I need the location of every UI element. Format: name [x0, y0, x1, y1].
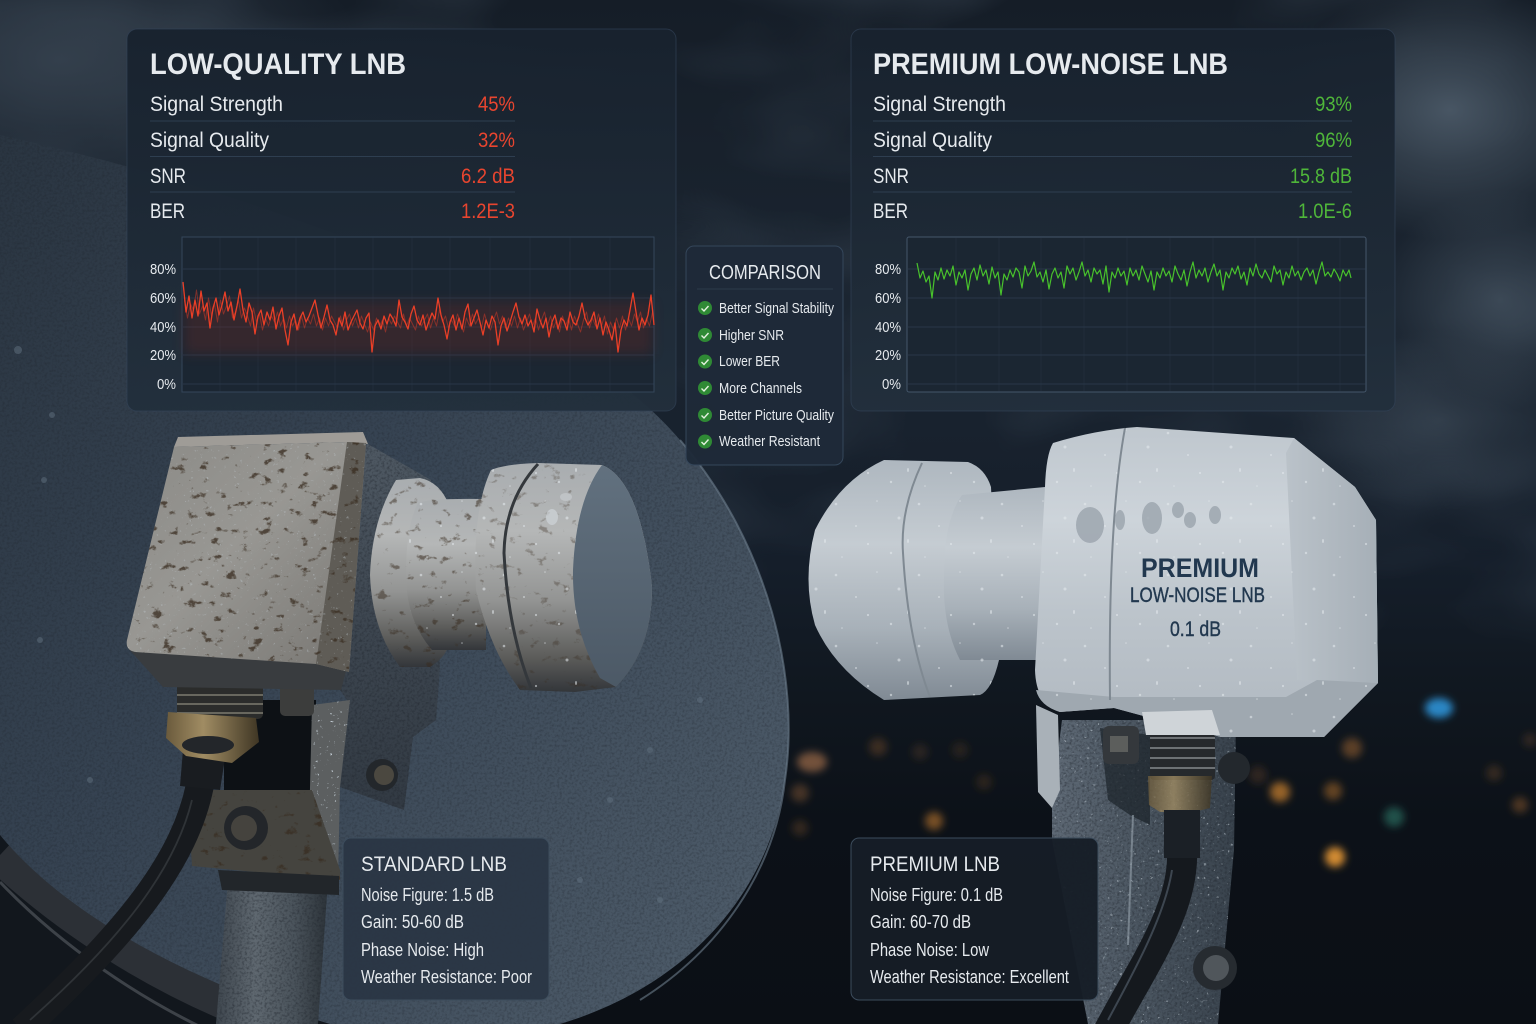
metrics table: Signal Strength — [150, 93, 283, 116]
spec list: Noise Figure: 0.1 dB — [870, 885, 1003, 905]
chart: red unstable signal — [150, 237, 654, 393]
chart: red unstable signal: 80% — [150, 262, 176, 278]
printed device label: LOW-NOISE LNB — [1130, 584, 1265, 607]
checklist items: More Channels — [719, 380, 802, 397]
bolt — [366, 759, 398, 791]
feed cap — [808, 460, 999, 700]
checklist items: Lower BER — [719, 353, 780, 370]
metrics table: 96% — [1315, 129, 1352, 152]
threaded connector — [166, 677, 263, 763]
spec list: Weather Resistance: Poor — [361, 967, 532, 987]
heading: PREMIUM LNB — [870, 853, 1000, 876]
support pipe — [216, 880, 328, 1024]
neck ring — [370, 478, 449, 667]
chart: green stable signal: 80% — [875, 262, 901, 278]
bolt — [280, 684, 314, 716]
chart: red unstable signal: 60% — [150, 291, 176, 307]
bright bar — [308, 700, 350, 880]
bolt — [1193, 946, 1237, 990]
checklist items — [719, 300, 834, 450]
metrics table: SNR — [873, 165, 909, 188]
panel: low-quality LNB — [127, 29, 676, 411]
heading: PREMIUM LOW-NOISE LNB — [873, 48, 1228, 81]
feed cap — [475, 463, 652, 692]
clamp — [190, 790, 340, 895]
chart: red unstable signal: 0% — [157, 377, 176, 393]
metrics table — [873, 93, 1352, 223]
threaded connector — [1148, 725, 1215, 812]
chart: green stable signal: 0% — [882, 377, 901, 393]
spec list — [361, 885, 532, 987]
bolt — [1218, 752, 1250, 784]
chart: green stable signal: 20% — [875, 348, 901, 364]
chart: green stable signal — [875, 237, 1366, 393]
premium LNB device — [808, 427, 1378, 1024]
collar — [1142, 710, 1220, 735]
heading: LOW-QUALITY LNB — [150, 48, 406, 81]
metrics table: 15.8 dB — [1290, 165, 1352, 188]
neck cylinder — [944, 487, 1045, 660]
check icons — [698, 301, 712, 448]
spec list: Gain: 60-70 dB — [870, 912, 971, 932]
bolt — [224, 806, 268, 850]
chart: green stable signal: 40% — [875, 320, 901, 336]
metrics table: SNR — [150, 165, 186, 188]
checklist items: Better Signal Stability — [719, 300, 834, 317]
metrics table: 1.2E-3 — [461, 200, 515, 223]
metrics table: 32% — [478, 129, 515, 152]
mounting bracket — [1036, 705, 1250, 1024]
metrics table: BER — [873, 200, 908, 223]
metrics table — [150, 93, 515, 223]
metrics table: Signal Quality — [873, 129, 992, 152]
spec list: Phase Noise: Low — [870, 940, 990, 960]
spec list: Weather Resistance: Excellent — [870, 967, 1069, 987]
metrics table: 6.2 dB — [461, 165, 515, 188]
printed device label — [1130, 553, 1265, 641]
dark cavity — [224, 700, 316, 795]
city bokeh lights — [791, 698, 1536, 867]
satellite dish — [0, 155, 790, 1024]
panel: premium low-noise LNB — [851, 29, 1395, 411]
checklist items: Better Picture Quality — [719, 407, 834, 424]
spec list: Phase Noise: High — [361, 940, 484, 960]
cable — [22, 750, 226, 1024]
box front — [127, 442, 366, 672]
neck cylinder — [406, 499, 486, 650]
low-quality LNB device — [22, 432, 652, 1024]
bolt — [1103, 726, 1139, 764]
housing body — [1035, 427, 1378, 737]
box top — [174, 432, 368, 447]
L bracket — [190, 443, 440, 895]
chart: green stable signal: 60% — [875, 291, 901, 307]
spec list: Noise Figure: 1.5 dB — [361, 885, 494, 905]
spec list — [870, 885, 1069, 987]
metrics table: BER — [150, 200, 185, 223]
panel: premium LNB specs — [851, 838, 1098, 1000]
metrics table: 1.0E-6 — [1298, 200, 1352, 223]
cable — [1108, 810, 1200, 1024]
spec list: Gain: 50-60 dB — [361, 912, 464, 932]
chart: red unstable signal: 20% — [150, 348, 176, 364]
chart: red unstable signal: 40% — [150, 320, 176, 336]
printed device label: PREMIUM — [1141, 553, 1259, 583]
metrics table: 93% — [1315, 93, 1352, 116]
metrics table: 45% — [478, 93, 515, 116]
panel: standard LNB specs — [343, 838, 549, 1000]
heading: COMPARISON — [709, 262, 821, 284]
metrics table: Signal Quality — [150, 129, 269, 152]
box underside — [127, 647, 349, 690]
metrics table: Signal Strength — [873, 93, 1006, 116]
panel: comparison checklist — [686, 246, 843, 465]
printed device label: 0.1 dB — [1170, 618, 1221, 641]
checklist items: Higher SNR — [719, 327, 784, 344]
heading: STANDARD LNB — [361, 853, 507, 876]
checklist items: Weather Resistant — [719, 433, 821, 450]
